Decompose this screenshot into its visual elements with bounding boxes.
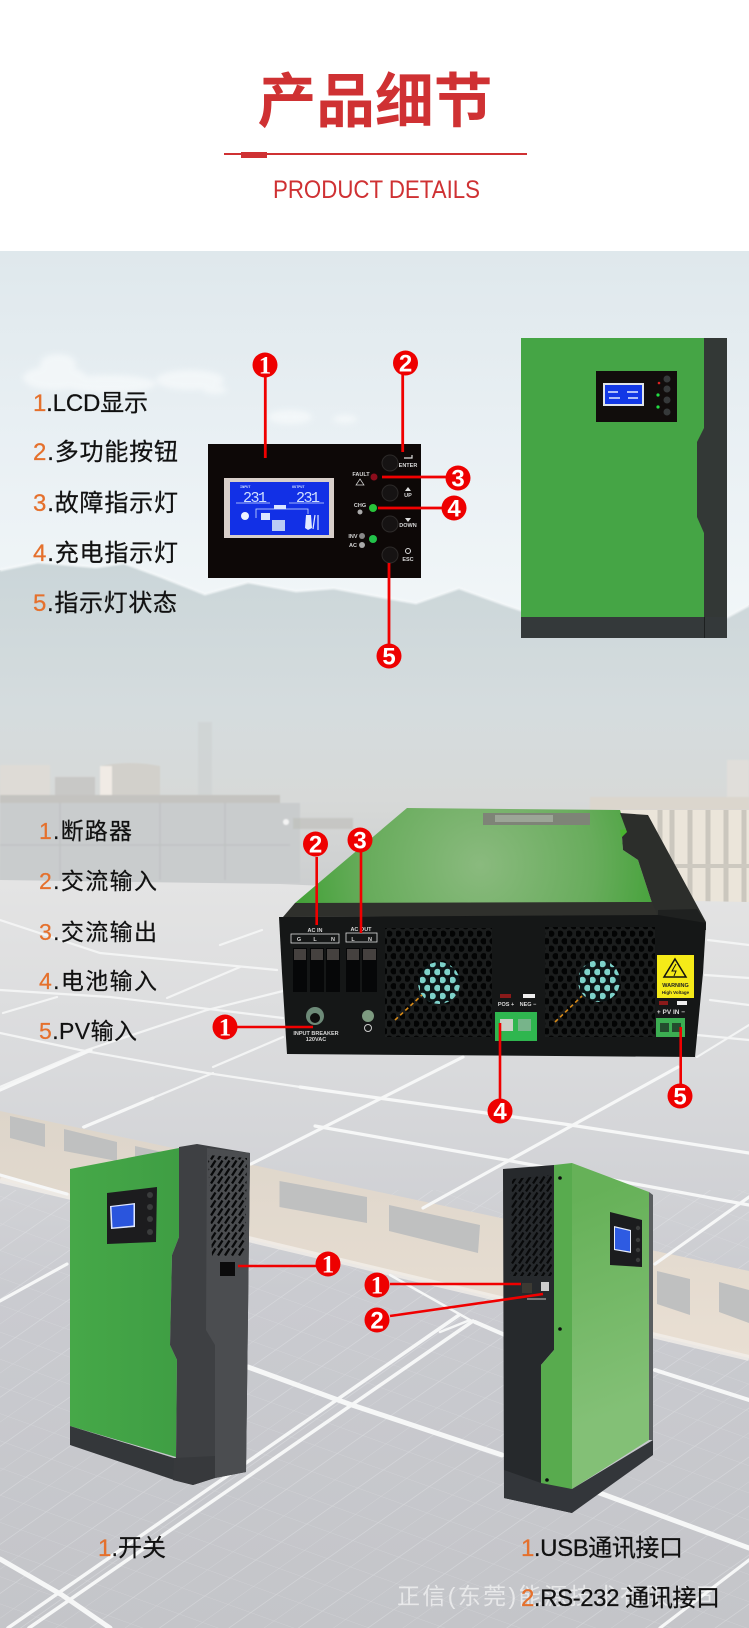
title divider — [224, 152, 527, 158]
caption: RS-232 port: 2.RS-232 通讯接口 — [521, 1585, 720, 1612]
list: rear panel labels: 5.PV输入 — [39, 1018, 137, 1044]
buttons — [382, 455, 398, 563]
mountains — [0, 562, 749, 900]
badge 1: 1 — [371, 1272, 383, 1300]
badge 1 — [212, 1014, 238, 1042]
AC breakers: L — [313, 937, 317, 943]
AC breakers: G — [297, 937, 301, 943]
LCD screen — [224, 478, 334, 538]
LCD screen: INPUT — [240, 486, 251, 490]
mini panel — [596, 371, 677, 422]
watermark: 正信(东莞)能源技术有限公司 — [397, 1583, 719, 1609]
list: front panel labels — [33, 390, 178, 617]
rear face — [279, 915, 706, 1057]
battery terminal: NEG − — [520, 1002, 536, 1008]
badge 4: 4 — [493, 1098, 507, 1126]
inverter rear view — [279, 808, 706, 1057]
badge 1 — [252, 352, 278, 380]
callouts on control panel — [252, 350, 470, 670]
indicator LEDs — [369, 474, 378, 543]
PV terminal: + PV IN − — [657, 1009, 685, 1016]
PV terminal — [656, 1001, 687, 1037]
button and indicator labels: CHG — [354, 503, 366, 509]
badge 2 — [364, 1308, 390, 1334]
badge 3 — [446, 466, 470, 492]
badge 3: 3 — [353, 828, 367, 854]
clouds — [23, 354, 357, 424]
badge 5: 5 — [673, 1084, 687, 1110]
LCD screen: OUTPUT — [292, 486, 305, 490]
inverter left side view — [70, 1144, 250, 1485]
side and bezel — [620, 813, 706, 930]
battery terminal — [495, 994, 537, 1041]
solar white lines — [0, 920, 749, 1628]
ground screw — [362, 1010, 374, 1032]
list: front panel labels: 2.多功能按钮 — [33, 439, 178, 466]
AC breakers: AC OUT — [350, 927, 372, 933]
badge 2: 2 — [309, 832, 322, 858]
mini panel — [610, 1212, 642, 1267]
badge 1: 1 — [219, 1014, 231, 1042]
button and indicator labels: INV — [348, 534, 358, 540]
button and indicator labels — [348, 455, 417, 563]
AC breakers: L — [351, 937, 355, 943]
AC breakers: AC IN — [308, 928, 323, 934]
badge 3 — [348, 828, 372, 854]
base — [504, 1440, 653, 1513]
list: rear panel labels: 4.电池输入 — [39, 968, 157, 994]
input breaker switch: 120VAC — [306, 1037, 326, 1043]
list: front panel labels: 1.LCD显示 — [33, 390, 148, 417]
vent — [510, 1175, 552, 1276]
ports — [522, 1282, 549, 1300]
badge 5 — [668, 1084, 692, 1110]
top display recess — [483, 813, 590, 825]
inverter front view — [521, 338, 727, 638]
badge 1: 1 — [259, 352, 271, 380]
mini panel — [107, 1187, 157, 1244]
top green cover — [295, 808, 652, 903]
badge 4: 4 — [447, 496, 461, 522]
black side — [503, 1165, 572, 1513]
list: front panel labels: 5.指示灯状态 — [33, 590, 177, 617]
control panel close-up — [208, 444, 421, 578]
list: front panel labels: 3.故障指示灯 — [33, 490, 178, 517]
LCD screen: 231 — [243, 490, 267, 507]
callout: switch: 1 — [322, 1252, 334, 1278]
badge 4 — [442, 496, 466, 522]
right strip — [649, 1192, 653, 1440]
dark side — [170, 1144, 250, 1485]
callouts on rear view — [212, 828, 692, 1126]
power switch — [220, 1262, 235, 1276]
badge 2 — [303, 832, 328, 858]
list: rear panel labels: 3.交流输出 — [39, 919, 157, 945]
caption: switch: 1.开关 — [98, 1535, 166, 1562]
warning label: High Voltage — [662, 990, 690, 995]
button and indicator labels: AC — [349, 543, 357, 549]
vent — [208, 1155, 247, 1256]
badge 4 — [488, 1098, 512, 1126]
green face left fold — [541, 1163, 572, 1489]
input breaker switch — [293, 1007, 339, 1043]
title: 产品细节 — [258, 69, 492, 135]
warning label — [657, 955, 694, 998]
fence — [620, 810, 749, 902]
badge 3: 3 — [451, 466, 465, 492]
list: rear panel labels — [39, 818, 157, 1044]
AC breakers: N — [368, 937, 372, 943]
list: rear panel labels: 2.交流输入 — [39, 868, 157, 894]
AC breakers: N — [331, 937, 335, 943]
battery terminal: POS + — [498, 1002, 514, 1008]
green face — [572, 1163, 649, 1489]
list: rear panel labels: 1.断路器 — [39, 818, 132, 844]
badge 2 — [393, 350, 418, 378]
LCD screen: 231 — [296, 490, 320, 507]
badge 1 — [364, 1272, 390, 1300]
button and indicator labels: ESC — [402, 557, 414, 563]
green face — [70, 1148, 179, 1457]
button and indicator labels: ENTER — [399, 463, 417, 469]
badge 5 — [376, 644, 402, 670]
callout: switch — [238, 1252, 340, 1278]
AC breakers — [291, 927, 377, 992]
base — [70, 1426, 174, 1480]
beige bridge band — [0, 1111, 749, 1358]
button and indicator labels: UP — [404, 493, 412, 499]
list: front panel labels: 4.充电指示灯 — [33, 540, 178, 567]
button and indicator labels: FAULT — [352, 472, 370, 478]
factory — [0, 722, 749, 883]
button and indicator labels: DOWN — [399, 523, 417, 529]
badge 2: 2 — [370, 1308, 384, 1334]
input breaker switch: INPUT BREAKER — [293, 1031, 339, 1037]
subtitle: PRODUCT DETAILS — [273, 176, 480, 204]
callouts: communication ports — [364, 1272, 543, 1334]
warning label: WARNING — [662, 983, 689, 989]
badge 5: 5 — [382, 644, 396, 670]
screws — [545, 1176, 562, 1482]
fan grilles — [385, 927, 655, 1037]
badge 2: 2 — [399, 350, 412, 378]
inverter right side view — [503, 1163, 653, 1513]
caption: USB port: 1.USB通讯接口 — [521, 1535, 683, 1562]
solar ground — [0, 880, 749, 1628]
page background: white header — [0, 0, 749, 251]
